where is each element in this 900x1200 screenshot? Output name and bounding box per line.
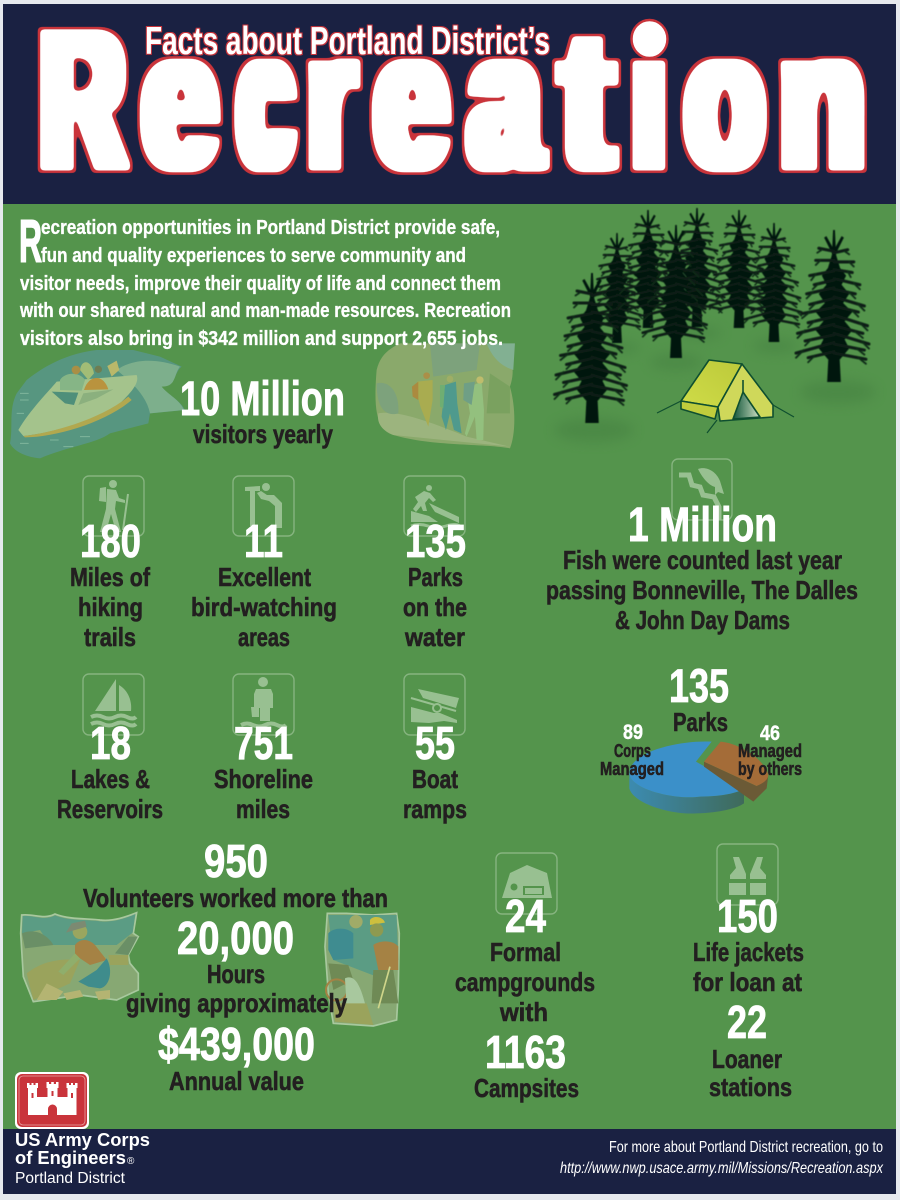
icon: bird watcher with scope — [233, 476, 294, 536]
volunteers stats block: Volunteers worked more than — [83, 883, 388, 913]
icon: fish ladder — [672, 459, 732, 520]
icon: life jacket — [717, 844, 778, 905]
stat: 18 lakes and reservoirs: 18 — [90, 717, 131, 769]
logo: corps castle — [15, 1072, 89, 1129]
icon: boat ramp — [404, 674, 465, 735]
stat: 55 boat ramps — [403, 717, 467, 824]
icon: person at shoreline — [233, 674, 294, 735]
intro lines: ecreation opportunities in Portland District provide safe, — [41, 216, 500, 239]
icon: boat launch park — [404, 476, 465, 536]
volunteers stats block: Annual value — [169, 1066, 304, 1096]
label: corps managed: Managed — [600, 758, 664, 779]
pine trees — [554, 208, 869, 423]
stat: 11 bird-watching areas — [191, 515, 337, 652]
agency name: Portland District — [15, 1170, 126, 1187]
stat: 11 bird-watching areas: 11 — [244, 515, 283, 567]
volunteers stats block: giving approximately — [126, 988, 347, 1018]
stat: 180 miles of hiking trails — [70, 515, 150, 652]
stat: 150 life jackets, 22 loaner stations — [693, 890, 804, 1102]
stat: 751 shoreline miles: Shoreline — [214, 764, 313, 794]
pie chart: parks management: Parks — [673, 707, 728, 737]
agency name: US Army Corps — [15, 1129, 150, 1150]
intro lines: with our shared natural and man-made resources. Recreation — [19, 299, 511, 322]
stat: 751 shoreline miles: 751 — [234, 717, 293, 769]
stat: 150 life jackets, 22 loaner stations: for loan at — [693, 967, 802, 997]
stat: 55 boat ramps: ramps — [403, 794, 467, 824]
agency name — [15, 1129, 150, 1187]
footer link text — [560, 1139, 884, 1177]
tent — [657, 360, 794, 433]
stat: 24 campgrounds, 1163 campsites: 24 — [505, 890, 546, 942]
stat: 180 miles of hiking trails: trails — [84, 622, 136, 652]
illustration: volunteer laying bricks — [21, 913, 138, 1002]
intro lines — [19, 216, 511, 350]
icon: sailboat — [83, 674, 144, 735]
header band — [3, 4, 896, 204]
stat: 1 million fish: & John Day Dams — [615, 605, 790, 635]
label: managed by others: Managed — [738, 740, 802, 761]
stat: 135 parks on the water — [403, 515, 467, 652]
stat: 150 life jackets, 22 loaner stations: 22 — [727, 996, 767, 1048]
stat: 1 million fish: 1 Million — [628, 499, 777, 552]
stat: 180 miles of hiking trails: Miles of — [70, 562, 150, 592]
intro paragraph — [19, 208, 511, 350]
icon: campground tent — [496, 853, 557, 914]
stat: 55 boat ramps: Boat — [412, 764, 458, 794]
green main panel — [3, 204, 896, 1129]
intro lines: visitor needs, improve their quality of life and connect them — [20, 272, 501, 295]
label: corps managed: 89 — [623, 721, 643, 744]
stat: 11 bird-watching areas: bird-watching — [191, 592, 337, 622]
stat: 18 lakes and reservoirs: Lakes & — [71, 764, 150, 794]
stat: 150 life jackets, 22 loaner stations: Loaner — [712, 1044, 782, 1074]
label: corps managed — [600, 721, 664, 779]
stat: 55 boat ramps: 55 — [415, 717, 455, 769]
stat: 18 lakes and reservoirs — [57, 717, 163, 824]
footer band — [3, 1129, 896, 1194]
stat: 24 campgrounds, 1163 campsites — [455, 890, 595, 1103]
label: managed by others: by others — [738, 758, 802, 779]
pie title: 135 — [669, 659, 729, 712]
stat: 180 miles of hiking trails: hiking — [78, 592, 143, 622]
subtitle and dot of the title's i: Facts about Portland District’s — [145, 20, 550, 63]
stat: 1 million fish — [546, 499, 858, 635]
title: Recreation — [38, 0, 868, 209]
volunteers stats block: 950 — [204, 835, 268, 887]
stat: 18 lakes and reservoirs: Reservoirs — [57, 794, 163, 824]
stat: 11 bird-watching areas: areas — [238, 622, 290, 652]
stat: 751 shoreline miles — [214, 717, 313, 824]
illustration: volunteers digging — [325, 913, 399, 1026]
pie chart: parks management — [600, 659, 802, 813]
stat: 150 life jackets, 22 loaner stations: Life jackets — [693, 937, 804, 967]
volunteers stats block: 20,000 — [177, 912, 294, 964]
intro lines: fun and quality experiences to serve community and — [41, 244, 466, 267]
volunteers stats block: $439,000 — [158, 1018, 315, 1070]
stat: 135 parks on the water: on the — [403, 592, 467, 622]
icon: hiker — [83, 476, 144, 536]
volunteers stats block — [83, 835, 388, 1096]
agency name: ® — [127, 1156, 135, 1167]
stat: 10 million visitors: visitors yearly — [193, 419, 333, 449]
label: managed by others: 46 — [760, 722, 780, 745]
stat: 150 life jackets, 22 loaner stations: stations — [709, 1072, 792, 1102]
volunteers stats block: Hours — [207, 959, 265, 989]
stat: 24 campgrounds, 1163 campsites: Formal — [490, 937, 561, 967]
stat: 135 parks on the water: 135 — [405, 515, 466, 567]
label: corps managed: Corps — [614, 740, 651, 761]
stat: 751 shoreline miles: miles — [236, 794, 290, 824]
stat: 135 parks on the water: water — [404, 622, 465, 652]
stat: 24 campgrounds, 1163 campsites: 1163 — [485, 1026, 566, 1078]
label: managed by others — [738, 722, 802, 779]
stat: 11 bird-watching areas: Excellent — [218, 562, 311, 592]
stat: 135 parks on the water: Parks — [408, 562, 463, 592]
stat: 24 campgrounds, 1163 campsites: campgrounds — [455, 967, 595, 997]
stat: 150 life jackets, 22 loaner stations: 150 — [717, 890, 778, 942]
stat: 24 campgrounds, 1163 campsites: Campsites — [474, 1073, 579, 1103]
illustration: hikers — [375, 343, 515, 448]
pie graphic — [629, 741, 768, 813]
illustration: motorboat — [10, 350, 185, 458]
tree shadows — [554, 327, 876, 442]
stat: 180 miles of hiking trails: 180 — [80, 515, 141, 567]
forest and tent illustration — [554, 208, 876, 442]
agency name: of Engineers — [15, 1147, 126, 1168]
stat: 10 million visitors — [180, 373, 345, 449]
stat: 1 million fish: Fish were counted last year — [563, 545, 842, 575]
stat: 10 million visitors: 10 Million — [180, 373, 345, 426]
drop cap: R — [19, 208, 42, 275]
intro lines: visitors also bring in $342 million and support 2,655 jobs. — [20, 327, 503, 350]
stat: 24 campgrounds, 1163 campsites: with — [499, 997, 548, 1027]
